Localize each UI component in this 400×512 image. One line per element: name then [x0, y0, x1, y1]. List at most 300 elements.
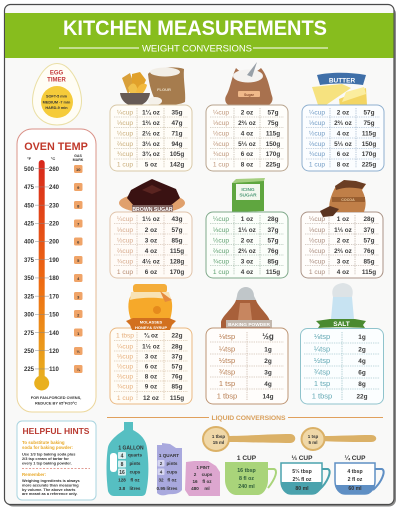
- table: sugar: [206, 105, 288, 171]
- panel: oven temp: 180: [49, 276, 60, 282]
- table: butter: 2⅔ oz: [334, 120, 352, 127]
- quart carton: 4: [160, 470, 163, 474]
- quart carton: cups: [167, 470, 178, 474]
- quart carton: litres: [167, 486, 178, 491]
- icon: icing sugar box: SUGAR: [239, 192, 257, 198]
- 1/4 cup: 60 ml: [348, 486, 362, 492]
- table: molasses and honey: ¾ oz: [144, 332, 158, 340]
- table: cocoa: 1 cup: [309, 269, 325, 276]
- table: sugar: ⅓cup: [213, 120, 229, 127]
- panel: oven temp: 220: [49, 222, 60, 228]
- table: salt: ½tsp: [314, 356, 330, 365]
- panel: oven temp: 190: [49, 258, 60, 264]
- 1 cup: [225, 455, 276, 495]
- table: baking powder: ¼tsp: [219, 344, 235, 354]
- table: icing sugar: ½cup: [213, 236, 229, 244]
- table: molasses and honey: 9 oz: [145, 384, 157, 390]
- egg timer: SOFT-5 min: [46, 94, 68, 98]
- table: icing sugar: 2⅔ oz: [238, 248, 256, 255]
- table: icing sugar: 4 oz: [241, 269, 253, 276]
- table: salt: 2g: [358, 346, 366, 354]
- table: butter: 8 oz: [337, 162, 349, 168]
- table: cocoa: 3 oz: [337, 258, 349, 266]
- table: brown sugar: 4½ oz: [142, 258, 160, 266]
- table: molasses and honey: 37g: [171, 354, 183, 360]
- table: butter: 150g: [362, 141, 376, 148]
- table: icing sugar: 76g: [267, 248, 279, 255]
- icon: butter: BUTTER: [329, 78, 355, 84]
- icon: sugar sack: Sugar: [244, 93, 255, 97]
- panel: helpful hints: HELPFUL HINTS: [23, 426, 90, 436]
- gallon jug: pints: [130, 461, 141, 466]
- table: icing sugar: 1⅓ oz: [238, 227, 256, 234]
- table: flour: 105g: [170, 151, 184, 158]
- table: flour: 2½ oz: [142, 130, 160, 138]
- table: butter: 170g: [362, 151, 376, 158]
- table: cocoa: 76g: [363, 248, 375, 255]
- panel: oven temp: 275: [24, 331, 35, 337]
- 1 cup: 240 ml: [238, 484, 255, 490]
- panel: oven temp: 7: [77, 222, 80, 226]
- table: flour: 1⅔ oz: [142, 120, 160, 127]
- table: cocoa: 1⅓ oz: [334, 227, 352, 234]
- pint carton: cups: [202, 472, 213, 477]
- table: brown sugar: 2 oz: [145, 227, 157, 234]
- table: butter: 115g: [362, 130, 376, 138]
- icon: brown sugar: [119, 179, 185, 213]
- table: molasses and honey: 1 cup: [117, 395, 133, 402]
- table: cocoa: 2⅔ oz: [334, 248, 352, 255]
- panel: oven temp: GAS: [74, 154, 82, 158]
- table: butter: ⅔cup: [309, 141, 325, 148]
- table: brown sugar: ¼cup: [117, 216, 133, 223]
- quart carton: 2: [160, 461, 163, 466]
- table: brown sugar: ½cup: [117, 236, 133, 244]
- table: sugar: ½cup: [213, 130, 229, 138]
- panel: oven temp: 8: [77, 204, 80, 208]
- table: sugar: 225g: [266, 162, 280, 168]
- table: molasses and honey: 8 oz: [145, 374, 157, 380]
- table: molasses and honey: 1 tbsp: [116, 332, 134, 340]
- gallon jug: 8: [121, 462, 124, 468]
- table: molasses and honey: 57g: [171, 364, 183, 370]
- panel: oven temp: 200: [49, 240, 60, 246]
- gallon jug: 3.8: [119, 486, 126, 491]
- panel: oven temp: 120: [49, 349, 60, 355]
- table: butter: 57g: [363, 110, 375, 116]
- panel: helpful hints: Weighing ingredients is always: [22, 478, 80, 483]
- quart carton: 32: [158, 478, 164, 482]
- icon: baking powder shaker: BAKING POWDER: [228, 322, 270, 328]
- table: molasses and honey: ⅔cup: [117, 374, 133, 380]
- table: butter: 4 oz: [337, 130, 349, 138]
- table: cocoa: [301, 212, 383, 278]
- panel: oven temp: FOR FAN-FORCED OVENS,: [31, 395, 81, 400]
- panel: oven temp: 170: [49, 294, 60, 300]
- table: butter: ½cup: [309, 130, 325, 138]
- table: molasses and honey: 22g: [171, 332, 183, 340]
- table: baking powder: 4g: [264, 381, 272, 388]
- panel: oven temp: 3: [77, 294, 80, 300]
- table: salt: 4g: [358, 358, 366, 365]
- table: butter: 1 cup: [309, 162, 325, 168]
- table: flour: 94g: [171, 141, 183, 148]
- table: icing sugar: 85g: [267, 258, 279, 266]
- panel: oven temp: 300: [24, 312, 35, 318]
- table: butter: 225g: [362, 162, 376, 168]
- header banner: [5, 13, 394, 58]
- table: cocoa: 85g: [363, 258, 375, 266]
- table: flour: [110, 105, 192, 171]
- gallon jug: cups: [130, 470, 141, 474]
- table: brown sugar: ⅔cup: [117, 248, 133, 255]
- table: flour: ⅔cup: [117, 141, 133, 148]
- 1/3 cup: [281, 455, 330, 494]
- table: sugar: 75g: [267, 120, 279, 127]
- table: baking powder: ⅛tsp: [219, 332, 235, 341]
- quart carton: fl oz: [167, 478, 177, 482]
- 1/3 cup: 2⅔ fl oz: [292, 477, 312, 483]
- table: salt: 6g: [358, 370, 366, 376]
- gallon jug: litres: [130, 486, 141, 491]
- panel: oven temp: ½: [77, 349, 81, 354]
- icon: salt shaker: [316, 283, 366, 328]
- title: KITCHEN MEASUREMENTS: [63, 17, 327, 40]
- table: sugar: 5⅓ oz: [238, 141, 256, 148]
- panel: helpful hints: To substitute baking: [22, 440, 65, 445]
- table: baking powder: 3g: [264, 370, 272, 376]
- panel: oven temp: °C: [51, 156, 55, 161]
- panel: oven temp: 400: [24, 240, 35, 246]
- table: flour: ¼cup: [117, 110, 133, 116]
- pint carton: 2: [194, 472, 197, 477]
- table: brown sugar: [110, 212, 192, 278]
- table: icing sugar: 115g: [266, 269, 280, 276]
- icon: honey jar: HONEY& SYRUP: [135, 325, 167, 330]
- panel: oven temp: ¼: [77, 367, 81, 372]
- table: baking powder: [206, 328, 288, 404]
- table: baking powder: 1g: [264, 346, 272, 354]
- egg timer: [32, 64, 82, 125]
- egg timer: TIMER: [47, 78, 66, 84]
- table: salt: [300, 328, 384, 404]
- pint carton: 1 PINT: [196, 465, 210, 470]
- icon: honey jar: [126, 284, 176, 330]
- table: cocoa: ⅓cup: [309, 227, 325, 234]
- table: cocoa: 1 oz: [337, 216, 349, 223]
- gallon jug: [106, 422, 148, 496]
- icon: icing sugar box: ICING: [241, 187, 255, 193]
- gallon jug: quarts: [128, 452, 142, 458]
- table: sugar: 2⅔ oz: [238, 120, 256, 127]
- table: cocoa: 4 oz: [337, 269, 349, 276]
- table: brown sugar: 1½ oz: [142, 215, 160, 223]
- table: flour: 3⅓ oz: [142, 141, 160, 148]
- 1/3 cup: 5⅓ tbsp: [292, 469, 312, 475]
- table: sugar: ¼cup: [213, 110, 229, 116]
- table: brown sugar: 3 oz: [145, 238, 157, 244]
- table: sugar: 115g: [266, 130, 280, 138]
- table: cocoa: 115g: [362, 269, 376, 276]
- 1/4 cup: 2 fl oz: [348, 477, 363, 483]
- icon: honey jar: MOLASSES: [140, 320, 163, 324]
- panel: oven temp: 6: [77, 240, 80, 244]
- table: butter: [302, 105, 384, 171]
- pint carton: ml: [204, 486, 210, 491]
- table: baking powder: ½tsp: [219, 356, 235, 365]
- table: flour: 5 oz: [145, 162, 157, 168]
- panel: oven temp: 260: [49, 167, 60, 173]
- egg timer: MEDIUM -7 min: [43, 100, 71, 104]
- table: icing sugar: ¼cup: [213, 216, 229, 223]
- table: brown sugar: 4 oz: [145, 248, 157, 255]
- table: sugar: 170g: [266, 151, 280, 158]
- table: flour: 47g: [171, 120, 183, 127]
- gallon jug: 128: [118, 478, 126, 482]
- table: molasses and honey: 115g: [170, 395, 184, 402]
- icon: teaspoon: 5 ml: [308, 440, 318, 445]
- table: flour: ⅓cup: [117, 120, 133, 127]
- table: brown sugar: 115g: [170, 248, 184, 255]
- table: butter: 5⅓ oz: [334, 141, 352, 148]
- table: sugar: ⅔cup: [213, 141, 229, 148]
- table: flour: ¾cup: [117, 151, 133, 158]
- table: molasses and honey: 6 oz: [145, 364, 157, 370]
- gallon jug: 16: [119, 470, 125, 476]
- gallon jug: fl oz: [130, 478, 140, 482]
- 1 cup: 16 tbsp: [237, 468, 257, 474]
- table: icing sugar: ⅔cup: [213, 248, 229, 255]
- panel: helpful hints: [17, 421, 96, 500]
- pint carton: 16: [192, 479, 198, 484]
- icon: baking powder shaker: [221, 287, 272, 328]
- table: butter: 6 oz: [337, 151, 349, 158]
- table: brown sugar: 85g: [171, 238, 183, 244]
- table: icing sugar: 37g: [267, 227, 279, 234]
- panel: oven temp: °F: [27, 156, 32, 161]
- table: brown sugar: 6 oz: [145, 269, 157, 276]
- table: cocoa: ¼cup: [309, 216, 325, 223]
- table: icing sugar: 3 oz: [241, 258, 253, 266]
- table: molasses and honey: ¼cup: [117, 344, 133, 350]
- panel: oven temp: 325: [24, 294, 35, 300]
- panel: oven temp: 450: [24, 204, 35, 210]
- 1/3 cup: 80 ml: [295, 486, 309, 492]
- table: sugar: 4 oz: [241, 130, 253, 138]
- table: molasses and honey: ⅓cup: [117, 354, 133, 360]
- table: molasses and honey: 1½ oz: [142, 342, 160, 350]
- panel: oven temp: 10: [76, 167, 81, 172]
- table: flour: 71g: [171, 130, 183, 138]
- panel: oven temp: [17, 129, 96, 412]
- table: brown sugar: ⅓cup: [117, 227, 133, 234]
- panel: oven temp: 250: [24, 349, 35, 355]
- table: butter: 2 oz: [337, 110, 349, 116]
- panel: oven temp: 5: [77, 258, 80, 263]
- table: brown sugar: 1 cup: [117, 269, 133, 276]
- table: flour: ½cup: [117, 130, 133, 138]
- table: brown sugar: 57g: [171, 227, 183, 234]
- table: icing sugar: 2 oz: [241, 238, 253, 244]
- panel: helpful hints: Remember:: [22, 472, 47, 477]
- panel: oven temp: 2: [77, 312, 80, 318]
- table: brown sugar: 43g: [171, 216, 183, 223]
- table: molasses and honey: [110, 328, 192, 404]
- icon: tablespoon: 1 tbsp: [212, 434, 225, 439]
- panel: oven temp: 4: [77, 276, 80, 281]
- panel: oven temp: 500: [24, 167, 35, 173]
- table: cocoa: 28g: [363, 216, 375, 223]
- table: icing sugar: 1 cup: [213, 269, 229, 276]
- quart carton: pints: [167, 461, 178, 466]
- panel: oven temp: 110: [49, 367, 59, 373]
- table: sugar: 8 oz: [241, 162, 253, 168]
- egg timer: EGG: [50, 70, 63, 76]
- egg timer: HARD-9 min: [45, 106, 68, 110]
- heading: liquid conversions: LIQUID CONVERSIONS: [212, 415, 286, 422]
- icon: cocoa bag: [320, 180, 366, 217]
- panel: helpful hints: 2/3 tsp cream of tartar for: [22, 456, 69, 461]
- table: molasses and honey: ¾cup: [117, 384, 133, 390]
- icon: tablespoon: 15 ml: [213, 440, 224, 445]
- table: salt: 1g: [358, 334, 366, 341]
- icon: teaspoon: [302, 428, 376, 450]
- table: sugar: 150g: [266, 141, 280, 148]
- table: flour: 35g: [171, 110, 183, 116]
- table: flour: 1¼ oz: [142, 108, 160, 116]
- icon: brown sugar: BROWN SUGAR: [132, 207, 173, 213]
- table: salt: 22g: [356, 394, 368, 400]
- table: brown sugar: ¾cup: [117, 258, 133, 266]
- icon: icing sugar box: [232, 178, 265, 212]
- table: baking powder: 1 tbsp: [217, 392, 237, 400]
- icon: teaspoon: 1 tsp: [308, 434, 318, 439]
- icon: tablespoon: [203, 427, 295, 451]
- gallon jug: 4: [121, 454, 124, 460]
- thermometer: [34, 160, 49, 390]
- 1/4 cup: [335, 454, 384, 494]
- table: cocoa: ¾cup: [309, 258, 325, 266]
- table: butter: 75g: [363, 120, 375, 127]
- table: molasses and honey: 76g: [171, 374, 183, 380]
- table: flour: 3¾ oz: [142, 150, 160, 158]
- panel: oven temp: 425: [24, 222, 35, 228]
- table: salt: 1 tbsp: [312, 392, 332, 400]
- panel: helpful hints: are meant as a reference only.: [22, 491, 78, 496]
- table: cocoa: 57g: [363, 238, 375, 244]
- subtitle: WEIGHT CONVERSIONS: [142, 44, 252, 54]
- table: flour: 1 cup: [117, 162, 133, 168]
- table: sugar: 6 oz: [241, 151, 253, 158]
- icon: butter: [312, 73, 367, 108]
- panel: helpful hints: soda for baking powder:: [22, 445, 74, 450]
- table: salt: ¾tsp: [314, 368, 330, 376]
- 1 cup: 1 CUP: [237, 455, 257, 462]
- table: sugar: 1 cup: [213, 162, 229, 168]
- icon: cocoa bag: COCOA: [341, 198, 355, 202]
- icon: salt shaker: SALT: [333, 321, 350, 328]
- table: brown sugar: 170g: [170, 269, 184, 276]
- table: salt: 1 tsp: [314, 379, 330, 388]
- table: baking powder: ¾tsp: [219, 368, 235, 376]
- panel: oven temp: 9: [77, 185, 80, 190]
- 1/4 cup: 4 tbsp: [347, 469, 363, 475]
- table: salt: ⅛tsp: [314, 332, 330, 341]
- panel: oven temp: REDUCE BY 65°F/20°C: [35, 400, 77, 406]
- quart carton: 1 QUART: [159, 453, 179, 458]
- table: sugar: 57g: [267, 110, 279, 116]
- table: sugar: 2 oz: [241, 110, 253, 116]
- table: salt: 8g: [358, 381, 366, 388]
- table: flour: 142g: [170, 162, 184, 168]
- table: butter: ¼cup: [309, 110, 325, 116]
- panel: helpful hints: more accurate than measuring: [22, 482, 79, 488]
- panel: oven temp: 1: [77, 331, 80, 336]
- panel: helpful hints: every 1 tsp baking powder.: [22, 460, 72, 466]
- icon: flour bag and wheat bowl: [120, 67, 185, 106]
- table: icing sugar: [206, 212, 288, 278]
- table: baking powder: 1 tsp: [219, 379, 235, 388]
- 1/4 cup: ¼ CUP: [345, 454, 366, 462]
- table: butter: ¾cup: [309, 151, 325, 158]
- table: salt: ¼tsp: [314, 344, 330, 354]
- panel: oven temp: 475: [24, 185, 35, 191]
- panel: oven temp: 230: [49, 204, 60, 210]
- pint carton: [185, 461, 220, 496]
- quart carton: 0.95: [157, 486, 166, 491]
- quart carton: [157, 443, 182, 495]
- 1 cup: 8 fl oz: [239, 476, 254, 482]
- panel: oven temp: 375: [24, 258, 35, 264]
- table: icing sugar: ¾cup: [213, 258, 229, 266]
- table: baking powder: ½g: [262, 332, 274, 341]
- table: sugar: ¾cup: [213, 151, 229, 158]
- table: molasses and honey: ½cup: [117, 362, 133, 370]
- table: cocoa: 2 oz: [337, 238, 349, 244]
- icon: sugar sack: [225, 62, 273, 105]
- panel: oven temp: OVEN TEMP: [24, 141, 88, 153]
- table: cocoa: ½cup: [309, 236, 325, 244]
- pint carton: fl oz: [202, 479, 212, 484]
- panel: oven temp: 140: [49, 331, 60, 337]
- table: icing sugar: 57g: [267, 238, 279, 244]
- table: cocoa: 37g: [363, 227, 375, 234]
- table: icing sugar: ⅓cup: [213, 227, 229, 234]
- table: icing sugar: 1 oz: [241, 216, 253, 223]
- 1/3 cup: ⅓ CUP: [292, 455, 313, 462]
- table: molasses and honey: 3 oz: [145, 354, 157, 360]
- table: molasses and honey: 28g: [171, 344, 183, 350]
- icon: flour bag and wheat bowl: FLOUR: [157, 87, 171, 92]
- panel: oven temp: 240: [49, 185, 60, 191]
- pint carton: 480: [191, 486, 199, 491]
- table: baking powder: 2g: [264, 358, 272, 365]
- table: icing sugar: 28g: [267, 216, 279, 223]
- panel: helpful hints: Use 1/3 tsp baking soda plus: [22, 452, 75, 456]
- table: baking powder: 14g: [262, 394, 274, 400]
- panel: oven temp: 225: [24, 367, 35, 373]
- table: cocoa: ⅔cup: [309, 248, 325, 255]
- gallon jug: 1 GALLON: [118, 446, 144, 452]
- table: molasses and honey: 85g: [171, 384, 183, 390]
- panel: helpful hints: by volume. The above charts: [22, 487, 75, 492]
- panel: oven temp: MARK: [73, 158, 84, 162]
- table: brown sugar: 128g: [170, 258, 184, 266]
- table: butter: ⅓cup: [309, 120, 325, 127]
- panel: oven temp: 350: [24, 276, 35, 282]
- panel: oven temp: 150: [49, 312, 60, 318]
- table: molasses and honey: 12 oz: [143, 395, 159, 402]
